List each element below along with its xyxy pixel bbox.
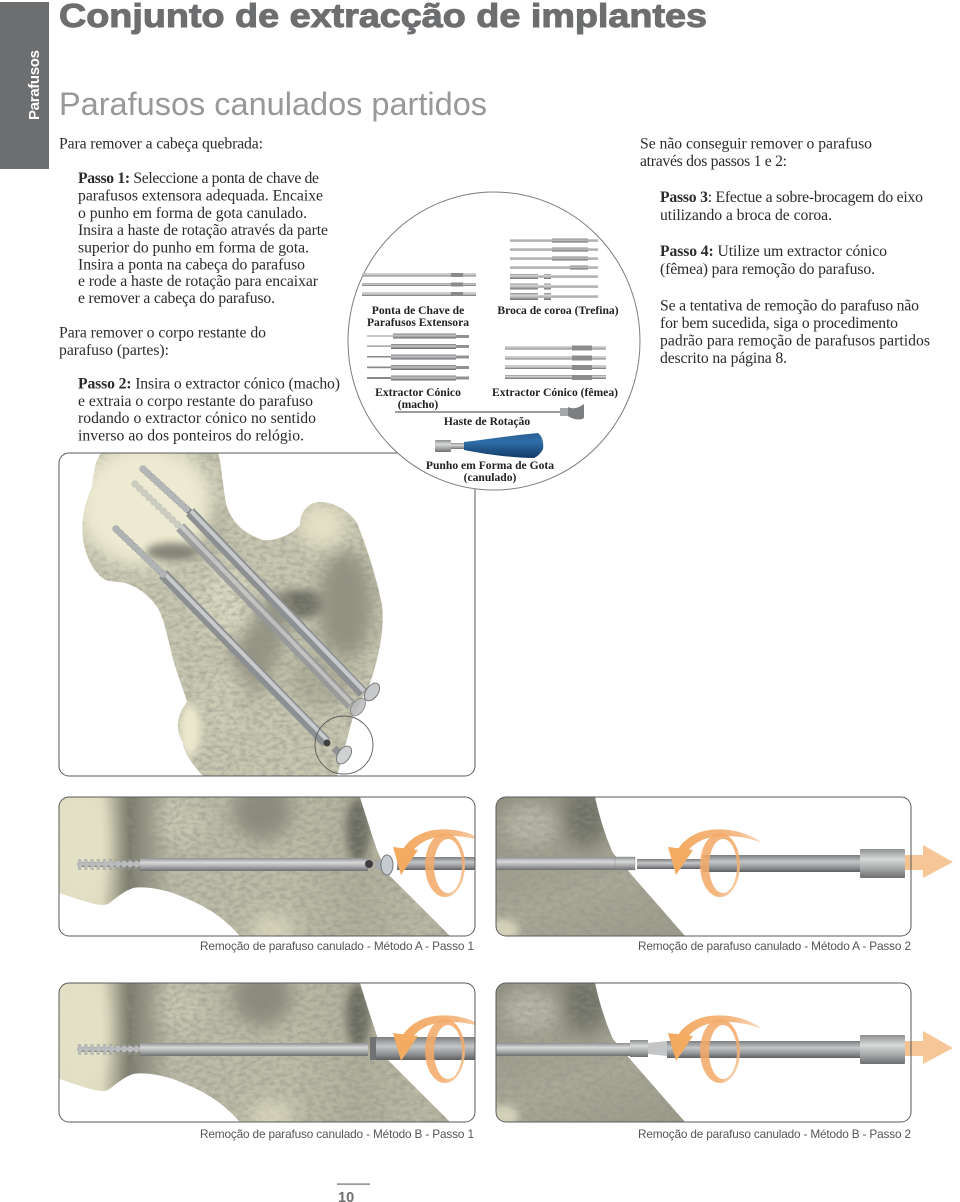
text block: remover o corpo: inverso ao dos ponteiros do relógio.	[78, 428, 304, 444]
instrument labels: Extractor Cónico	[375, 386, 461, 399]
text block: passos 3 e 4: for bem sucedida, siga o procedimento	[660, 315, 898, 332]
text block: passos 3 e 4: Se a tentativa de remoção do parafuso não	[660, 298, 919, 314]
rod	[496, 857, 635, 870]
text block: passos 3 e 4: através dos passos 1 e 2:	[640, 153, 787, 170]
caption B2: Remoção de parafuso canulado - Método B - Passo 2	[638, 1127, 911, 1141]
text block: remover o corpo: e extraia o corpo restante do parafuso	[78, 393, 313, 410]
panel: Método B - Passo 2	[487, 974, 953, 1127]
trephine sleeve	[370, 1037, 475, 1060]
page number	[337, 1184, 370, 1202]
side tab: Parafusos: Parafusos	[26, 50, 43, 120]
text block: passos 3 e 4: descrito na página 8.	[660, 350, 787, 367]
instrument: Punho em Forma de Gota	[435, 433, 543, 458]
text block: remover o corpo: Passo 2: Insira o extractor cónico (macho)	[78, 376, 340, 392]
instrument labels: (canulado)	[464, 471, 517, 484]
instrument labels: Extractor Cónico (fêmea)	[492, 386, 618, 399]
text block: remover a cabeça: Passo 1: Seleccione a ponta de chave de	[78, 170, 319, 187]
extractor tool and arrow	[637, 829, 953, 897]
text block: remover o corpo	[59, 324, 340, 444]
side tab: Parafusos	[0, 2, 49, 169]
text block: passos 3 e 4	[640, 136, 930, 367]
text block: remover o corpo: rodando o extractor cónico no sentido	[78, 410, 316, 427]
caption A2: Remoção de parafuso canulado - Método A - Passo 2	[638, 939, 911, 953]
instrument labels: Punho em Forma de Gota	[426, 459, 554, 472]
instrument labels: Broca de coroa (Trefina)	[497, 304, 619, 317]
text block: passos 3 e 4: Passo 4: Utilize um extractor cónico	[660, 243, 887, 260]
panel: instruments circle	[348, 192, 640, 490]
caption B1: Remoção de parafuso canulado - Método B - Passo 1	[200, 1127, 474, 1141]
text block: remover a cabeça: o punho em forma de gota canulado.	[78, 205, 307, 222]
text block: remover a cabeça: parafusos extensora adequada. Encaixe	[78, 188, 323, 204]
panel: Método A - Passo 1	[58, 796, 476, 936]
text block: remover a cabeça: Para remover a cabeça quebrada:	[59, 136, 263, 152]
instruments: Broca de coroa	[510, 238, 598, 300]
screw with head	[78, 855, 393, 875]
instruments: Extractor Cónico (macho)	[367, 334, 469, 380]
screw: middle	[135, 484, 369, 719]
screw: upper	[143, 469, 383, 704]
panel: Método B - Passo 1	[58, 982, 476, 1122]
rotation arrow	[393, 829, 474, 897]
rotation arrow	[393, 1015, 474, 1083]
instrument labels	[367, 304, 619, 484]
text block: remover a cabeça: e rode a haste de rotação para encaixar	[78, 273, 319, 290]
caption A1: Remoção de parafuso canulado - Método A - Passo 1	[200, 939, 474, 953]
instruments: Ponta de Chave	[362, 273, 476, 296]
panel: Método A - Passo 2	[487, 788, 953, 941]
text block: remover a cabeça: e remover a cabeça do parafuso.	[78, 290, 275, 307]
detail circle	[315, 716, 373, 774]
instruments: Extractor Cónico (fêmea)	[505, 346, 606, 380]
subtitle: Parafusos canulados partidos	[59, 86, 487, 122]
text block: passos 3 e 4: (fêmea) para remoção do parafuso.	[660, 261, 875, 278]
instrument labels: Ponta de Chave de	[372, 304, 464, 317]
instrument labels: Haste de Rotação	[444, 415, 530, 428]
text block: remover a cabeça	[59, 136, 328, 307]
instrument: Haste de Rotação	[395, 404, 584, 419]
text block: passos 3 e 4: Passo 3: Efectue a sobre-brocagem do eixo	[660, 189, 923, 206]
text block: passos 3 e 4: utilizando a broca de coroa.	[660, 207, 832, 224]
screw: lower, broken	[116, 529, 355, 767]
extractor tool	[397, 857, 475, 870]
panel: femur with three screws	[59, 443, 475, 776]
text block: remover o corpo: parafuso (partes):	[59, 342, 169, 359]
rod	[496, 1043, 630, 1056]
text block: remover a cabeça: Insira a haste de rotação através da parte	[78, 222, 328, 239]
screw	[78, 1043, 368, 1056]
instrument labels: Parafusos Extensora	[367, 316, 469, 329]
panel frame	[59, 453, 475, 776]
text block: passos 3 e 4: Se não conseguir remover o parafuso	[640, 136, 872, 152]
text block: passos 3 e 4: padrão para remoção de parafusos partidos	[660, 332, 930, 350]
text block: remover o corpo: Para remover o corpo restante do	[59, 324, 266, 342]
text block: remover a cabeça: Insira a ponta na cabeça do parafuso	[78, 256, 305, 273]
trephine tool and arrow	[630, 1015, 953, 1083]
text block: remover a cabeça: superior do punho em forma de gota.	[78, 239, 309, 256]
instrument labels: (macho)	[398, 398, 438, 411]
